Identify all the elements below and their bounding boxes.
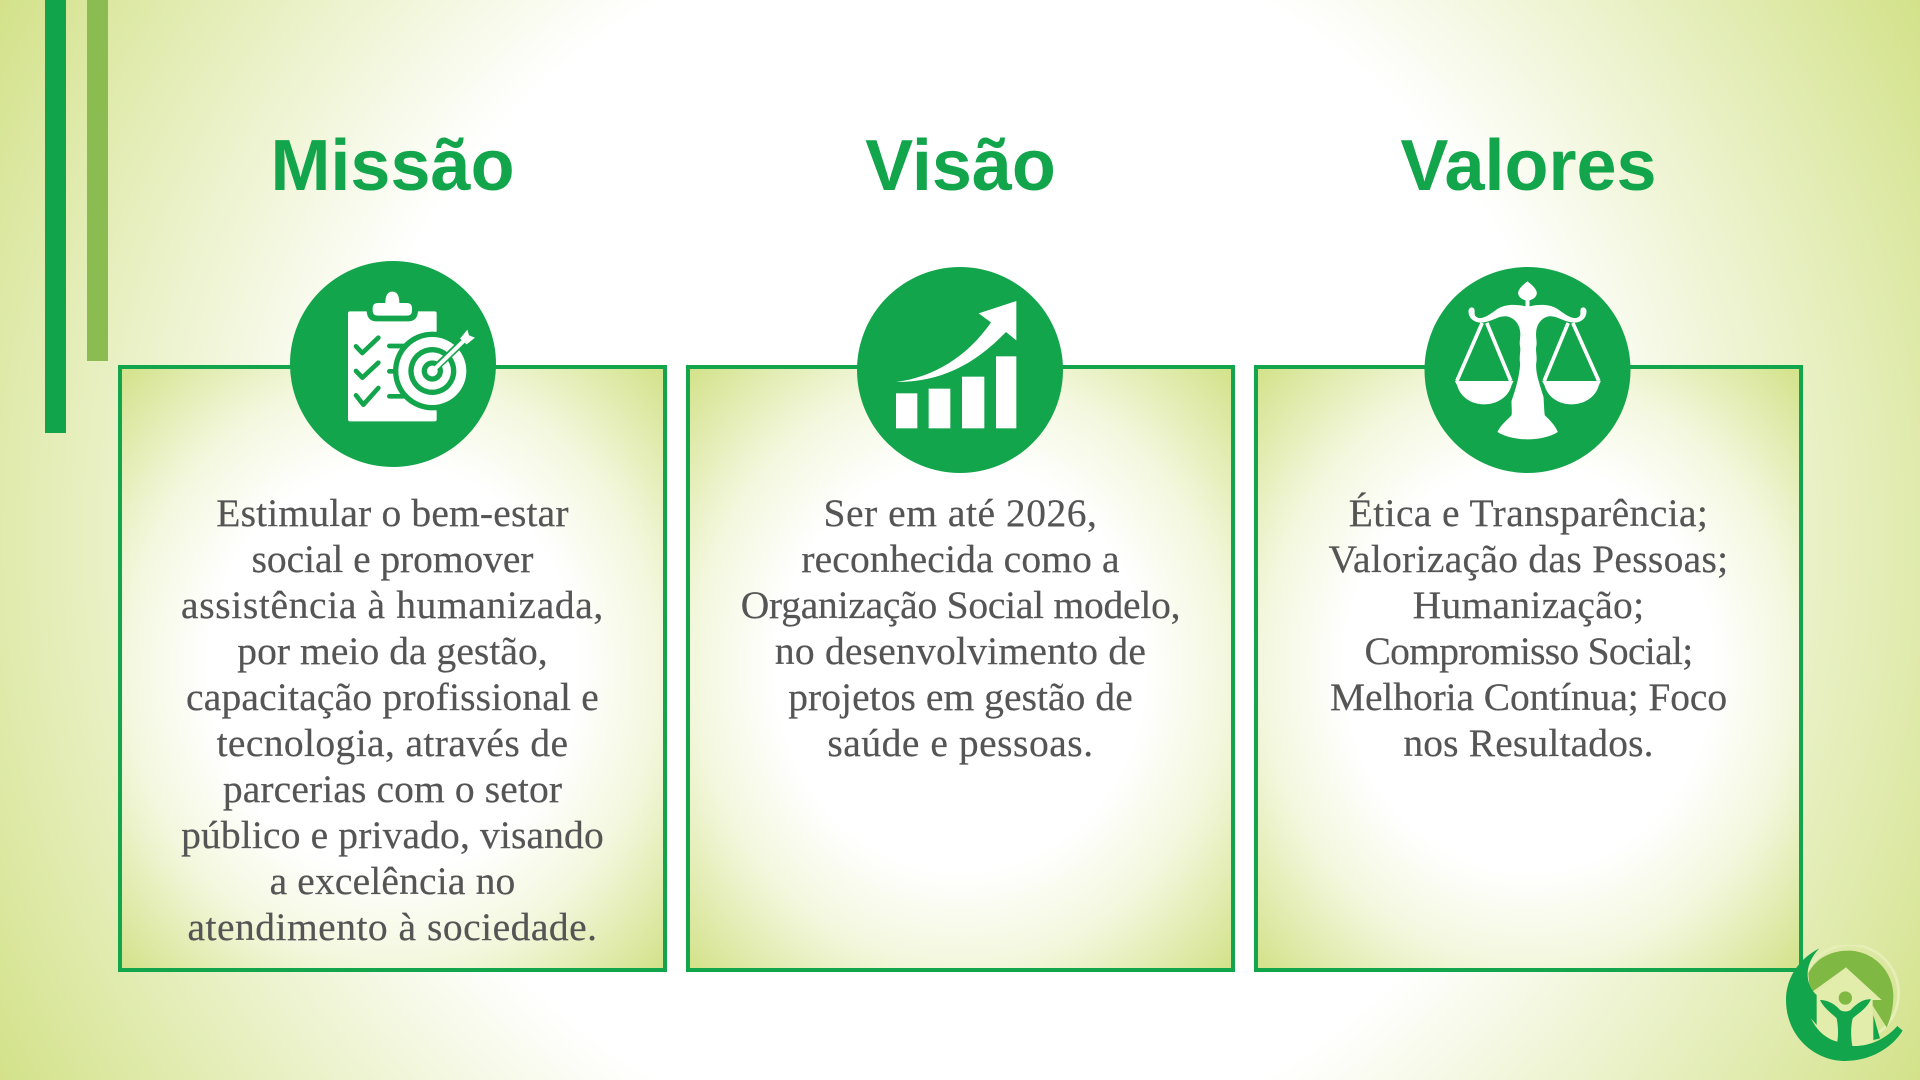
heading: Missão: Missão — [270, 126, 515, 206]
panel: visão — [686, 365, 1235, 972]
text: valores: Ética e Transparência; — [1349, 491, 1708, 535]
text: valores: Compromisso Social; — [1365, 629, 1692, 673]
text: visão: projetos em gestão de — [788, 675, 1133, 719]
text: visão — [741, 491, 1180, 765]
text: valores — [1328, 491, 1728, 765]
text: visão: saúde e pessoas. — [827, 721, 1094, 765]
text: missão: atendimento à sociedade. — [187, 905, 598, 949]
text: missão: capacitação profissional e — [186, 675, 599, 719]
icon: scales of justice — [1424, 267, 1630, 473]
icon: clipboard with target — [290, 261, 496, 467]
text: missão: Estimular o bem-estar — [216, 491, 569, 535]
text: visão: Ser em até 2026, — [824, 491, 1097, 535]
text: missão: por meio da gestão, — [237, 629, 548, 673]
text: missão: parcerias com o setor — [223, 767, 562, 811]
decorative bar: dark green — [45, 0, 66, 433]
text: missão — [181, 491, 604, 949]
icon: growth chart — [857, 267, 1063, 473]
text: missão: tecnologia, através de — [217, 721, 568, 765]
text: visão: no desenvolvimento de — [775, 629, 1146, 673]
text: valores: Melhoria Contínua; Foco — [1330, 675, 1727, 719]
text: valores: Humanização; — [1413, 583, 1644, 627]
heading: Valores: Valores — [1400, 126, 1657, 206]
panel: valores — [1254, 365, 1803, 972]
text: missão: a excelência no — [270, 859, 515, 903]
text: missão: social e promover — [252, 537, 533, 581]
panel: missão — [118, 365, 667, 972]
text: visão: Organização Social modelo, — [741, 583, 1180, 627]
text: valores: Valorização das Pessoas; — [1329, 537, 1728, 581]
text: visão: reconhecida como a — [801, 537, 1120, 581]
logo: house and person — [1786, 945, 1903, 1061]
decorative bar: light green — [87, 0, 108, 361]
heading: Visão: Visão — [865, 126, 1056, 206]
text: missão: público e privado, visando — [181, 813, 604, 857]
text: missão: assistência à humanizada, — [181, 583, 604, 627]
text: valores: nos Resultados. — [1403, 721, 1654, 765]
